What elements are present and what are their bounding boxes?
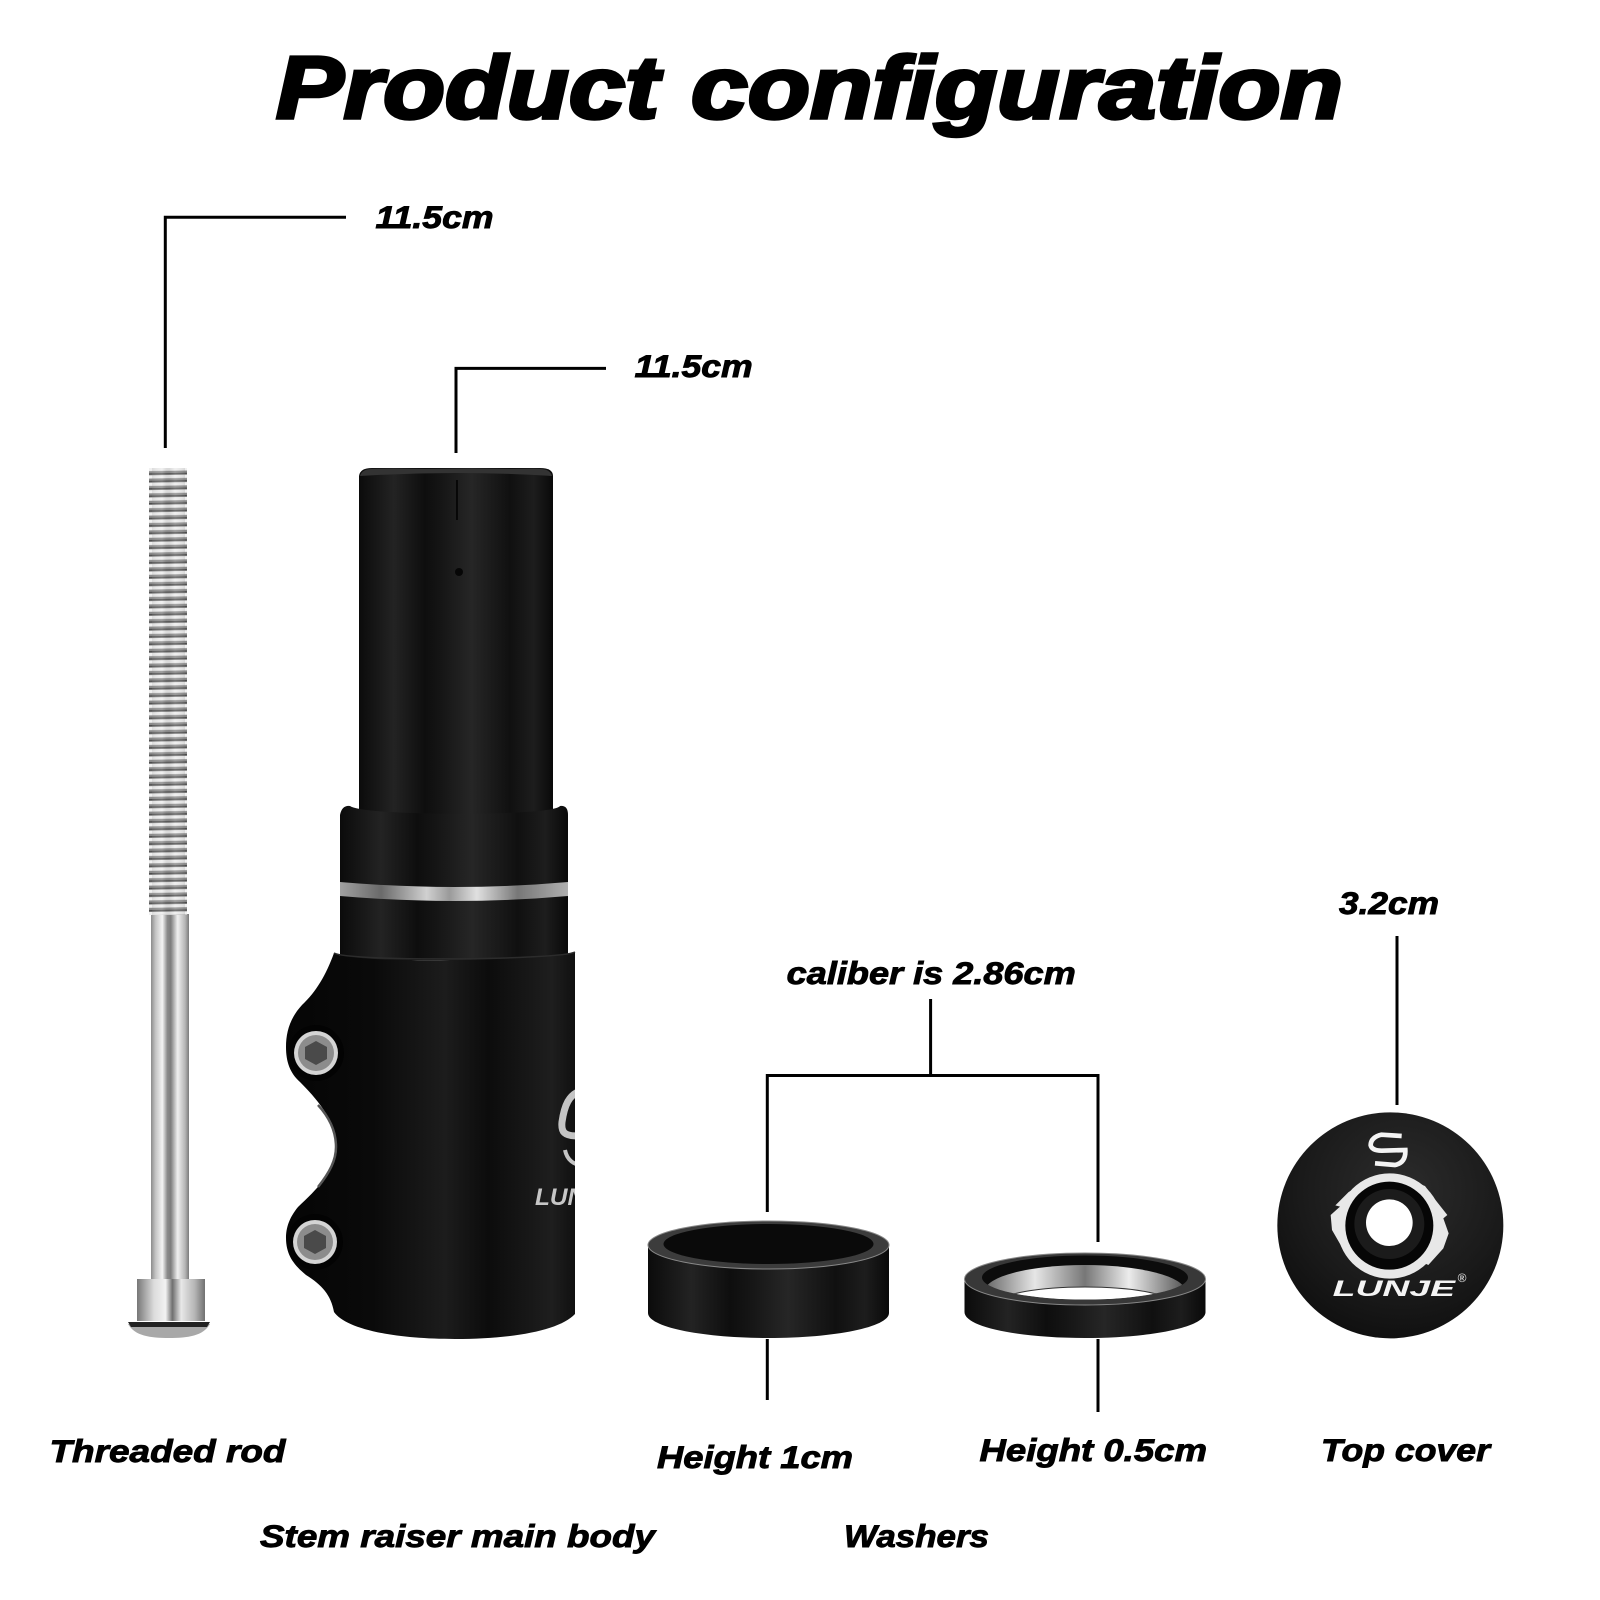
label: stem raiser main body: Stem raiser main body [260, 1518, 657, 1554]
callout: top cover diameter: 3.2cm [1339, 885, 1439, 921]
callout: washer caliber [767, 955, 1098, 1242]
registered mark: ® [1458, 1271, 1467, 1285]
brand mark [1371, 1135, 1405, 1165]
notch highlight [318, 1105, 336, 1187]
label: washers: Washers [844, 1518, 989, 1554]
icon: stem raiser main body [286, 468, 576, 1339]
collar [340, 806, 568, 960]
cap logo text: LUNJE [1333, 1276, 1457, 1301]
label: top cover: Top cover [1321, 1432, 1492, 1468]
seam line [334, 952, 575, 959]
lower clamp body [286, 952, 575, 1339]
title: Product [276, 38, 663, 137]
callout: washer caliber: caliber is 2.86cm [787, 955, 1076, 991]
lower bolt [287, 1214, 343, 1270]
callout: threaded rod length: 11.5cm [376, 199, 494, 235]
callout: threaded rod length [165, 199, 494, 448]
brand mark on body: LUNJE [535, 1184, 616, 1211]
icon: 1cm washer [648, 1221, 889, 1338]
upper tube [359, 468, 553, 835]
icon: threaded rod [128, 468, 210, 1338]
silver band [340, 882, 568, 901]
label: threaded rod: Threaded rod [50, 1433, 286, 1469]
callout lines: washer heights [767, 1339, 1098, 1412]
ring emblem [1331, 1173, 1449, 1279]
label: height 0.5cm: Height 0.5cm [980, 1432, 1207, 1468]
brand mark on body [536, 1090, 575, 1205]
title: configuration [691, 38, 1343, 137]
label: height 1cm: Height 1cm [657, 1439, 853, 1475]
callout: stem raiser length: 11.5cm [635, 348, 753, 384]
upper bolt [288, 1025, 344, 1081]
callout: stem raiser length [456, 348, 753, 453]
icon: 0.5cm washer [964, 1253, 1206, 1338]
icon: top cover [1277, 1112, 1503, 1338]
title [276, 38, 1343, 137]
